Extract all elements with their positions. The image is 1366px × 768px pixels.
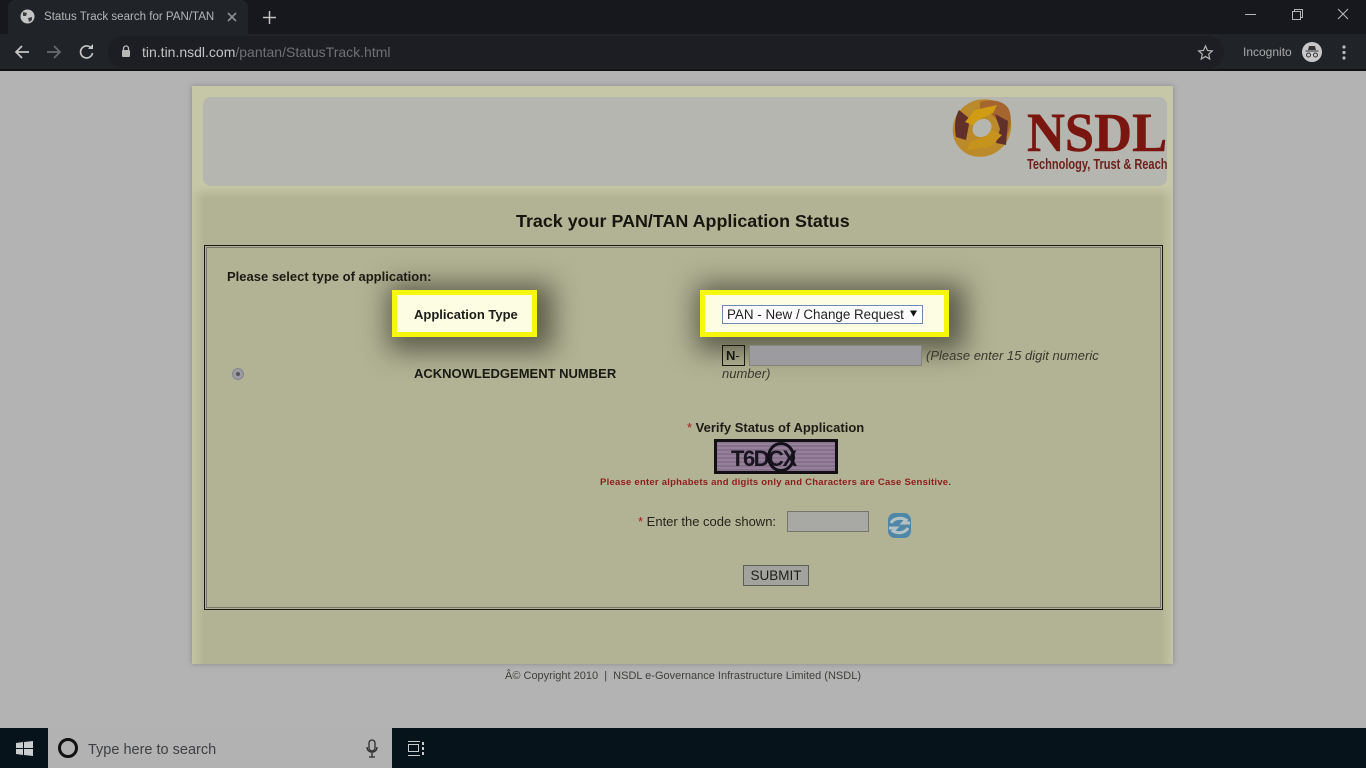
panel: header banner — [203, 97, 1167, 186]
N prefix box: N- — [726, 348, 740, 363]
callout: application type select — [700, 290, 949, 337]
card top cream band — [192, 86, 1173, 198]
icon: back arrow — [14, 45, 29, 59]
N prefix box — [722, 345, 745, 366]
card right edge highlight — [1161, 176, 1173, 664]
icon: incognito avatar — [1302, 42, 1322, 62]
submit button — [743, 565, 809, 586]
callout: application type — [392, 290, 537, 337]
select control — [722, 305, 923, 324]
browser toolbar — [0, 34, 1366, 70]
windows taskbar — [0, 728, 1366, 768]
icon: reload — [80, 44, 94, 59]
search placeholder: Type here to search — [88, 742, 216, 758]
card left edge highlight — [192, 176, 204, 664]
panel: form frame — [204, 245, 1163, 610]
select value: PAN - New / Change Request — [727, 307, 904, 322]
active tab — [8, 0, 248, 34]
logo wordmark: NSDL — [1027, 102, 1167, 163]
icon: lock — [122, 45, 130, 57]
captcha text: T6DCX — [731, 446, 796, 471]
case sensitivity note: Please enter alphabets and digits only and Characters are Case Sensitive. — [600, 477, 951, 488]
icon: star — [1197, 44, 1214, 60]
icon: menu dots — [1342, 45, 1346, 60]
acknowledgement input — [749, 345, 922, 366]
application type label: Application Type — [414, 307, 518, 322]
code input — [787, 511, 869, 532]
icon: cortana ring — [58, 738, 78, 758]
icon: task view — [408, 741, 424, 756]
radio dot — [236, 372, 240, 376]
radio button — [232, 368, 244, 380]
code label: * Enter the code shown: — [638, 514, 776, 529]
window controls — [1245, 8, 1348, 20]
icon: refresh captcha — [888, 513, 911, 538]
verify heading: * Verify Status of Application — [687, 420, 864, 435]
search box — [48, 728, 392, 768]
captcha image — [714, 439, 838, 474]
icon: globe — [20, 10, 34, 24]
copyright footer: Â© Copyright 2010 | NSDL e-Governance Infrastructure Limited (NSDL) — [505, 670, 861, 682]
incognito label: Incognito — [1243, 45, 1292, 59]
form prompt: Please select type of application: — [227, 269, 431, 284]
icon: NSDL logo — [952, 99, 1012, 157]
toolbar bottom border — [0, 69, 1366, 71]
icon: windows start — [16, 741, 33, 756]
submit button: SUBMIT — [750, 568, 802, 583]
input hint: (Please enter 15 digit numeric number) — [722, 348, 1099, 381]
captcha circle — [767, 442, 795, 472]
icon: tab close — [228, 12, 236, 22]
logo tagline: Technology, Trust & Reach — [1027, 157, 1167, 173]
icon: dropdown caret — [910, 310, 917, 316]
browser tab strip — [0, 0, 1366, 34]
panel: page card — [192, 86, 1173, 664]
url: tin.tin.nsdl.com/pantan/StatusTrack.html — [142, 44, 390, 60]
icon: forward arrow — [47, 46, 61, 58]
tab title: Status Track search for PAN/TAN — [44, 11, 214, 23]
acknowledgement label: ACKNOWLEDGEMENT NUMBER — [414, 366, 616, 381]
icon: microphone — [366, 739, 378, 758]
icon: new tab — [263, 11, 276, 24]
heading: Track your PAN/TAN Application Status — [516, 211, 850, 231]
address bar — [108, 36, 1224, 68]
